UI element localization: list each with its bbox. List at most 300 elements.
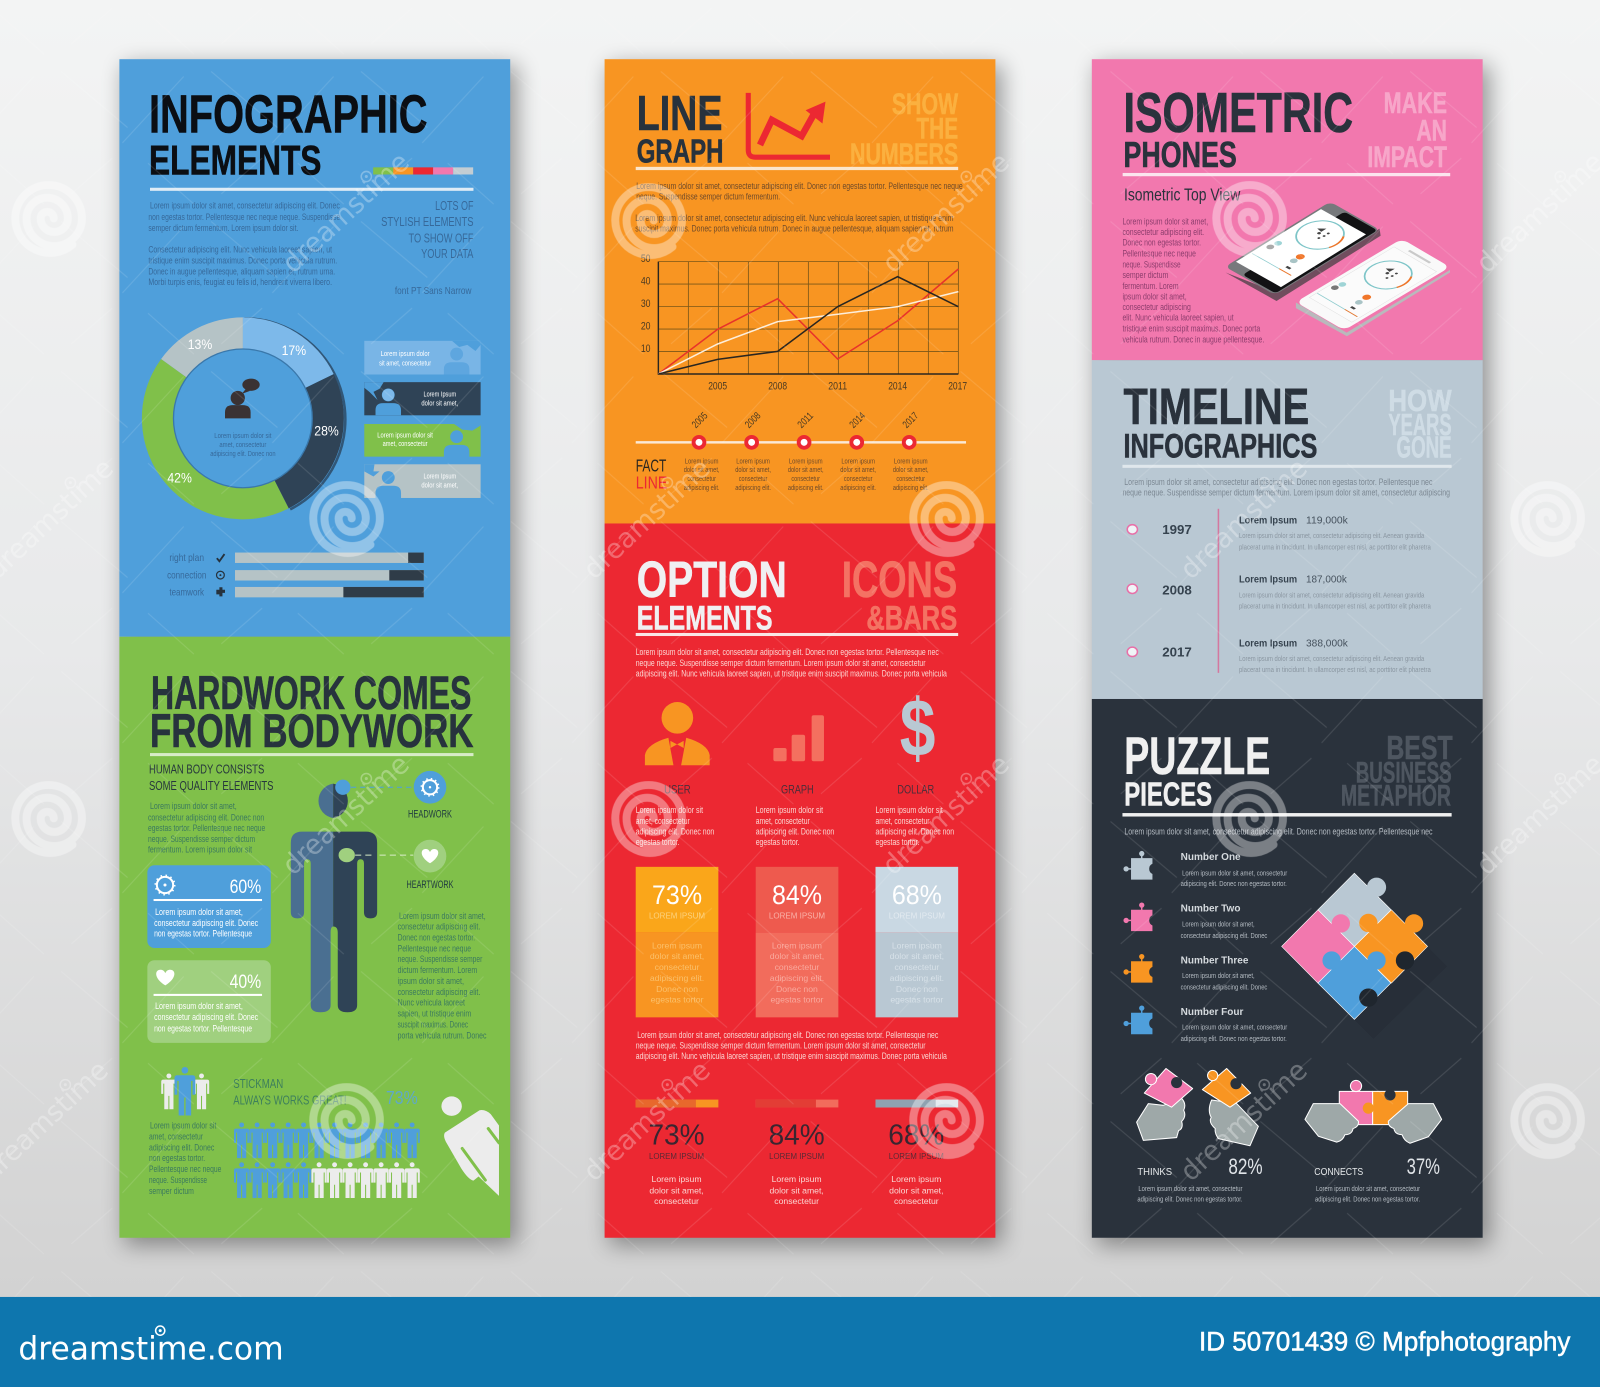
- body text: consectetur adipiscing elit.: [1122, 227, 1204, 237]
- stat: connects: 37%: [1407, 1154, 1440, 1179]
- legend icons: [1123, 851, 1152, 1034]
- x axis labels: 2008: [768, 380, 787, 392]
- phone: dark: [1225, 202, 1381, 301]
- donut chart: [142, 317, 345, 519]
- stat: thinks: THINKS: [1137, 1167, 1173, 1178]
- pictogram chart: [234, 1122, 420, 1198]
- timeline entry 1997: Lorem ipsum dolor sit amet, consectetur adipiscing elit. Aenean gravida: [1239, 531, 1425, 540]
- fact line label: [636, 456, 667, 492]
- timeline entry 2008: placerat urna in tincidunt. In ullamcorper est nisl, ac porttitor elit pharetra: [1239, 602, 1431, 611]
- body text: tristique enim suscipit maximus. Donec porta: [1122, 324, 1260, 334]
- intro text: Consectetur adipiscing elit. Nunc vehicula laoreet sapien, ut: [148, 245, 332, 255]
- speech bar labels: dolor sit amet,: [421, 481, 458, 489]
- timeline entry 1997: placerat urna in tincidunt. In ullamcorper est nisl, ac porttitor elit pharetra: [1239, 542, 1431, 551]
- stat captions: consectetur: [654, 1196, 699, 1206]
- body text: ipsum dolor sit amet,: [1122, 291, 1187, 301]
- card: 68%: Donec non: [896, 984, 938, 994]
- body text: [1122, 216, 1264, 345]
- card: 84%: dolor sit amet,: [770, 951, 824, 961]
- timeline years: 2011: [796, 410, 816, 431]
- icon descriptions: egestas tortor.: [636, 837, 680, 847]
- card: 73%: adipiscing elit.: [650, 973, 704, 983]
- intro text: [148, 201, 340, 287]
- timeline axis: [1218, 509, 1219, 673]
- body text left: neque. Suspendisse semper dictum: [148, 834, 255, 844]
- donut caption: amet, consectetur: [219, 440, 267, 449]
- timeline markers: [1127, 525, 1137, 657]
- body text: fermentum. Lorem: [1122, 281, 1179, 291]
- stat: thinks: 82%: [1228, 1154, 1263, 1179]
- side heading: icons and bars: ICONS: [842, 551, 957, 608]
- intro text: Donec in augue pellentesque, aliquam sapien et, rutrum urna.: [148, 267, 335, 277]
- progress labels: teamwork: [169, 588, 205, 599]
- progress labels: connection: [167, 571, 206, 582]
- icon: user: [645, 702, 710, 765]
- legend text: adipiscing elit. Donec non egestas tortor.: [1181, 879, 1287, 888]
- timeline descriptions: [684, 456, 929, 492]
- timeline descriptions: dolor sit amet,: [840, 465, 876, 474]
- side heading: show the numbers: NUMBERS: [850, 138, 958, 171]
- body text left: fermentum. Lorem ipsum dolor sit: [148, 845, 252, 855]
- heading: puzzle pieces: PIECES: [1124, 777, 1212, 814]
- series white: [658, 292, 958, 374]
- body text right: neque. Suspendisse semper: [398, 954, 482, 964]
- progress bars: [167, 553, 424, 599]
- stat: thinks: Lorem ipsum dolor sit amet, consectetur: [1138, 1184, 1243, 1193]
- icon descriptions: egestas tortor.: [876, 837, 919, 847]
- timeline years: 2008: [1162, 582, 1192, 597]
- body text lower left: [149, 1121, 222, 1196]
- connector: head to headwork: [351, 786, 413, 788]
- speech bar labels: Lorem Ipsum: [423, 473, 456, 481]
- card: 73%: 73%: [652, 880, 702, 910]
- stat captions: [649, 1174, 944, 1206]
- body text left: Lorem ipsum dolor sit amet,: [150, 801, 237, 811]
- side note: YOUR DATA: [421, 246, 474, 261]
- body text: consectetur adipiscing: [1122, 302, 1191, 312]
- heading: option elements: OPTION: [637, 551, 787, 608]
- stat captions: dolor sit amet,: [769, 1185, 824, 1195]
- fact line timeline: [636, 410, 966, 492]
- stickman heading: STICKMAN: [233, 1076, 283, 1091]
- side note: TO SHOW OFF: [408, 230, 473, 245]
- timeline descriptions: adipiscing elit.: [788, 483, 824, 492]
- card: 60%: Lorem ipsum dolor sit amet,: [155, 907, 243, 917]
- stickman heading: [233, 1076, 347, 1107]
- card: 40%: [147, 960, 271, 1043]
- body text right: ipsum dolor sit amet,: [398, 976, 464, 986]
- progress labels: right plan: [169, 553, 204, 564]
- card: 73%: LOREM IPSUM: [649, 911, 705, 920]
- stat figures: LOREM IPSUM: [769, 1151, 824, 1161]
- side heading: best business metaphor: BEST: [1386, 730, 1453, 767]
- icon: headwork: [414, 771, 446, 804]
- card: 68%: consectetur: [894, 962, 939, 972]
- icon: heartwork: [414, 840, 446, 872]
- stat figures: LOREM IPSUM: [889, 1151, 944, 1161]
- intro text: [635, 181, 963, 234]
- intro text: tristique enim suscipit maximus. Donec porta vehicula rutrum.: [148, 255, 337, 265]
- body text right: dictum fermentum. Lorem: [398, 965, 477, 975]
- side heading: how years gone: HOW: [1388, 384, 1452, 418]
- footer logo: dreamstime.com: [18, 1332, 284, 1368]
- middle text: adipiscing elit. Nunc vehicula laoreet sapien, ut tristique enim suscipit maximus. Donec porta vehicula: [636, 1051, 947, 1061]
- heading: infographic elements: [149, 85, 428, 183]
- side heading: show the numbers: SHOW: [892, 88, 958, 121]
- progress icons: [216, 554, 225, 596]
- middle text: Lorem ipsum dolor sit amet, consectetur adipiscing elit. Donec non egestas tortor. Pellentesque nec: [637, 1030, 939, 1040]
- intro text: semper dictum fermentum. Lorem ipsum dolor sit.: [148, 223, 298, 233]
- x axis labels: 2017: [948, 380, 967, 392]
- line chart: [641, 253, 967, 392]
- subheading: SOME QUALITY ELEMENTS: [149, 778, 274, 793]
- donut percentages: 28%: [314, 424, 339, 440]
- heading: timeline infographics: [1123, 378, 1317, 465]
- heading: puzzle pieces: [1124, 727, 1270, 814]
- body text: vehicula rutrum. Donec in augue pellentesque.: [1122, 335, 1264, 345]
- stat bars: [636, 1100, 958, 1107]
- stat: connects: Lorem ipsum dolor sit amet, consectetur: [1316, 1184, 1420, 1193]
- timeline entry 2008: [1239, 575, 1431, 611]
- stat figures: LOREM IPSUM: [649, 1151, 704, 1161]
- intro text: Morbi turpis enis, feugiat eu felis id, hendrerit viverra libero.: [148, 277, 332, 287]
- legend text: consectetur adipiscing elit. Donec: [1181, 982, 1267, 991]
- intro text: adipiscing elit. Nunc vehicula laoreet sapien, ut tristique enim suscipit maximus. Donec porta vehicula: [636, 669, 947, 679]
- stat figures: 84%: [769, 1120, 825, 1152]
- body text left: egestas tortor. Pellentesque nec neque: [148, 823, 265, 833]
- heading: timeline infographics: TIMELINE: [1123, 378, 1309, 435]
- stat figures: [648, 1120, 944, 1161]
- x axis labels: 2014: [888, 380, 907, 392]
- body text: elit. Nunc vehicula laoreet sapien, ut: [1122, 313, 1234, 323]
- card: 73%: [636, 867, 718, 1017]
- legend text: Number One: [1181, 852, 1241, 863]
- icon: rising graph: [748, 93, 830, 157]
- legend text: Lorem ipsum dolor sit amet, consectetur: [1182, 869, 1288, 878]
- connector: heart to heartwork: [355, 854, 413, 856]
- timeline descriptions: consectetur: [896, 474, 925, 483]
- donut percentages: 42%: [167, 471, 192, 487]
- footer credit: ID 50701439 © Mpfphotography: [1199, 1327, 1571, 1357]
- speech bar labels: amet, consectetur: [383, 440, 428, 448]
- heading: puzzle pieces: PUZZLE: [1124, 727, 1270, 786]
- timeline years: 2017: [901, 410, 921, 431]
- timeline entry 2017: Lorem ipsum dolor sit amet, consectetur adipiscing elit. Aenean gravida: [1239, 654, 1425, 663]
- body text right: consectetur adipiscing elit.: [398, 987, 480, 997]
- icon: gear: [155, 875, 175, 895]
- side heading: best business metaphor: METAPHOR: [1341, 780, 1451, 813]
- timeline descriptions: adipiscing elit.: [735, 483, 771, 492]
- icon: hand with pink piece: [1137, 1068, 1193, 1140]
- card: 84%: [756, 867, 838, 1017]
- speech bar labels: sit amet, consectetur: [379, 359, 432, 367]
- icon descriptions: amet, consectetur: [756, 816, 810, 826]
- stat captions: dolor sit amet,: [889, 1185, 944, 1195]
- speech bars: [364, 341, 481, 498]
- subheading: Isometric Top View: [1124, 185, 1241, 205]
- subheading: [149, 761, 274, 793]
- stat captions: consectetur: [894, 1196, 939, 1206]
- card: 40%: Lorem ipsum dolor sit amet,: [155, 1001, 243, 1011]
- icon labels: [407, 808, 454, 891]
- stat: connects: [1314, 1154, 1440, 1204]
- panel background blue: [119, 59, 510, 637]
- card: 84%: 84%: [772, 880, 822, 910]
- body text lower left: amet, consectetur: [149, 1131, 203, 1141]
- speech bar labels: dolor sit amet,: [421, 400, 458, 408]
- card: 60%: [147, 865, 271, 948]
- intro text: neque. Suspendisse semper dictum fermentum.: [636, 191, 780, 201]
- icon descriptions: [636, 805, 954, 847]
- card: 73%: dolor sit amet,: [650, 951, 704, 961]
- intro text: Lorem ipsum dolor sit amet, consectetur adipiscing elit. Donec non egestas tortor. Pellentesque nec: [636, 647, 939, 657]
- heading: hardwork: [150, 667, 474, 757]
- intro text: Lorem ipsum dolor sit amet, consectetur adipiscing elit. Donec non egestas tortor. Pellentesque nec neque: [636, 181, 963, 191]
- icon labels: USER: [664, 783, 691, 796]
- body text: Pellentesque nec neque: [1122, 249, 1196, 259]
- icon descriptions: egestas tortor.: [756, 837, 800, 847]
- panel: line graph: [605, 59, 995, 523]
- footer bar: [0, 1297, 1600, 1387]
- y axis labels: 30: [641, 298, 651, 310]
- panel background pink: [1092, 59, 1483, 360]
- card: 68%: adipiscing elit.: [890, 973, 944, 983]
- timeline entry 2008: Lorem ipsum dolor sit amet, consectetur adipiscing elit. Aenean gravida: [1239, 590, 1425, 599]
- timeline entry 1997: [1239, 515, 1431, 551]
- body text: Lorem ipsum dolor sit amet,: [1122, 216, 1208, 226]
- icon descriptions: amet, consectetur: [636, 816, 690, 826]
- panel background dark: [1092, 699, 1483, 1238]
- body text lower left: Lorem ipsum dolor sit: [150, 1121, 217, 1131]
- series red: [658, 269, 958, 374]
- timeline years: [690, 410, 921, 431]
- side heading: show the numbers: THE: [916, 112, 958, 145]
- icon labels: HEADWORK: [408, 808, 453, 820]
- stat: thinks: adipiscing elit. Donec non egestas tortor.: [1137, 1195, 1242, 1204]
- body text left: consectetur adipiscing elit. Donec non: [148, 812, 264, 822]
- side note: STYLISH ELEMENTS: [381, 214, 474, 229]
- progress labels: [167, 553, 206, 599]
- timeline markers: [692, 435, 917, 450]
- heading: infographic elements: ELEMENTS: [149, 136, 321, 183]
- side note: [381, 198, 474, 297]
- stat: 73%: 73%: [386, 1087, 418, 1108]
- icon: bar graph: [773, 715, 824, 761]
- timeline descriptions: dolor sit amet,: [893, 465, 929, 474]
- body text right: Nunc vehicula laoreet: [398, 998, 465, 1008]
- heading: isometric phones: [1123, 81, 1353, 175]
- legend text: Lorem ipsum dolor sit amet, consectetur: [1182, 1023, 1288, 1032]
- card: 40%: 40%: [230, 971, 261, 993]
- card: 68%: 68%: [892, 880, 942, 910]
- subheading: HUMAN BODY CONSISTS: [149, 761, 264, 776]
- body text: Donec non egestas tortor.: [1122, 238, 1201, 248]
- intro text: [636, 647, 947, 679]
- card: 73%: Lorem ipsum: [652, 940, 702, 950]
- panel: option elements: [605, 523, 995, 1238]
- side note: LOTS OF: [435, 198, 473, 213]
- legend text: consectetur adipiscing elit. Donec: [1181, 931, 1267, 940]
- icon descriptions: amet, consectetur: [876, 816, 930, 826]
- timeline descriptions: Lorem ipsum: [894, 456, 928, 465]
- panel background orange: [605, 59, 995, 523]
- panel: puzzle pieces: [1092, 699, 1483, 1238]
- card: 40%: consectetur adipiscing elit. Donec: [154, 1012, 259, 1022]
- icon labels: [664, 783, 934, 796]
- speech bar labels: [377, 350, 458, 489]
- body text lower left: neque. Suspendisse: [149, 1175, 207, 1185]
- intro text: Lorem ipsum dolor sit amet, consectetur adipiscing elit. Nunc vehicula laoreet sapien, ut tristique enim: [635, 213, 954, 223]
- intro text: neque neque. Suspendisse semper dictum fermentum. Lorem ipsum dolor sit amet, consectetur: [636, 658, 926, 668]
- timeline years: [1162, 522, 1192, 660]
- timeline descriptions: Lorem ipsum: [789, 456, 823, 465]
- body text right: [398, 911, 487, 1040]
- timeline descriptions: dolor sit amet,: [788, 465, 824, 474]
- timeline descriptions: adipiscing elit.: [893, 483, 929, 492]
- body text lower left: Pellentesque nec neque: [149, 1164, 222, 1174]
- body text: semper dictum: [1122, 270, 1168, 280]
- icon: person with speech bubble: [225, 379, 260, 418]
- heading: infographic elements: INFOGRAPHIC: [149, 85, 428, 145]
- heading: hardwork: HARDWORK COMES: [151, 667, 471, 719]
- y axis labels: [641, 253, 651, 355]
- timeline entry 2017: [1239, 639, 1431, 674]
- timeline descriptions: Lorem ipsum: [841, 456, 875, 465]
- stat: connects: adipiscing elit. Donec non egestas tortor.: [1315, 1195, 1420, 1204]
- timeline entry 2008: 187,000k: [1306, 575, 1347, 586]
- middle text: neque neque. Suspendisse semper dictum fermentum. Lorem ipsum dolor sit amet, consectetur: [636, 1040, 926, 1050]
- card: 40%: non egestas tortor. Pellentesque: [154, 1023, 252, 1033]
- icon descriptions: adipiscing elit. Donec non: [876, 827, 954, 837]
- card: 73%: Donec non: [656, 984, 698, 994]
- stat captions: Lorem ipsum: [772, 1174, 822, 1184]
- stat: connects: CONNECTS: [1314, 1167, 1364, 1178]
- heading: isometric phones: ISOMETRIC: [1123, 81, 1353, 144]
- timeline descriptions: dolor sit amet,: [684, 465, 719, 474]
- y axis labels: 40: [641, 275, 651, 287]
- icon descriptions: adipiscing elit. Donec non: [636, 827, 714, 837]
- heading: isometric phones: PHONES: [1123, 135, 1237, 175]
- icon labels: HEARTWORK: [407, 879, 454, 891]
- icon: hand with orange piece: [1202, 1068, 1258, 1146]
- panel: infographic elements: [119, 59, 510, 637]
- card: 60%: non egestas tortor. Pellentesque: [154, 928, 252, 938]
- fact line label: FACT: [636, 456, 667, 476]
- side heading: make an impact: MAKE: [1384, 87, 1447, 120]
- x axis labels: 2011: [828, 380, 847, 392]
- fact line label: LINE: [636, 472, 667, 492]
- legend text: [1181, 852, 1288, 1043]
- side heading: make an impact: AN: [1416, 115, 1447, 148]
- timeline descriptions: Lorem ipsum: [736, 456, 770, 465]
- timeline years: 2005: [690, 410, 710, 431]
- intro text: neque neque. Suspendisse semper dictum fermentum. Lorem ipsum dolor sit amet, consectetur adipiscing: [1122, 488, 1450, 498]
- body text right: Pellentesque nec neque: [398, 943, 471, 953]
- heading: line graph: GRAPH: [637, 134, 723, 171]
- intro text: Lorem ipsum dolor sit amet, consectetur adipiscing elit. Donec: [150, 201, 340, 211]
- icon: three figures: [161, 1067, 209, 1116]
- body text right: consectetur adipiscing elit.: [398, 922, 480, 932]
- stat captions: Lorem ipsum: [891, 1174, 941, 1184]
- stat: thinks: [1137, 1154, 1263, 1204]
- legend text: adipiscing elit. Donec non egestas tortor.: [1181, 1034, 1287, 1043]
- x axis labels: 2005: [708, 380, 727, 392]
- body text right: sapien, ut tristique enim: [398, 1009, 471, 1019]
- heading: option elements: ELEMENTS: [637, 600, 772, 638]
- donut caption: [210, 431, 276, 458]
- side heading: show the numbers: [850, 88, 958, 171]
- heading: hardwork: FROM BODYWORK: [150, 705, 474, 757]
- timeline descriptions: consectetur: [791, 474, 820, 483]
- icon labels: GRAPH: [781, 783, 814, 796]
- side heading: icons and bars: [842, 551, 957, 638]
- card: 84%: adipiscing elit.: [770, 973, 824, 983]
- colour swatch bar: [373, 167, 473, 174]
- card: 73%: egestas tortor: [651, 995, 704, 1005]
- timeline entry 2017: 388,000k: [1306, 639, 1348, 650]
- body text lower left: adipiscing elit. Donec: [149, 1142, 215, 1152]
- card: 68%: egestas tortor: [890, 995, 943, 1005]
- legend text: Number Three: [1181, 955, 1249, 966]
- panel background grey: [1092, 360, 1483, 699]
- heading: option elements: [637, 551, 787, 638]
- speech bar labels: Lorem ipsum dolor sit: [377, 431, 433, 439]
- card: 60%: 60%: [230, 876, 261, 898]
- timeline descriptions: consectetur: [739, 474, 768, 483]
- stat figures: 73%: [648, 1120, 705, 1152]
- timeline descriptions: dolor sit amet,: [735, 465, 771, 474]
- column shadows: [124, 65, 1490, 1245]
- body text lower left: non egestas tortor.: [149, 1153, 205, 1163]
- timeline entry 1997: Lorem Ipsum: [1239, 515, 1298, 526]
- card: 84%: consectetur: [775, 962, 819, 972]
- card: 84%: LOREM IPSUM: [769, 911, 825, 920]
- card: 84%: egestas tortor: [770, 995, 824, 1005]
- stat captions: consectetur: [774, 1196, 819, 1206]
- side heading: make an impact: [1367, 87, 1447, 174]
- card: 68%: dolor sit amet,: [890, 951, 944, 961]
- heading: line graph: LINE: [637, 87, 722, 141]
- card: 73%: consectetur: [655, 962, 700, 972]
- side heading: icons and bars: &BARS: [866, 600, 957, 638]
- legend text: Number Two: [1181, 904, 1240, 915]
- timeline descriptions: consectetur: [687, 474, 716, 483]
- phone: white: [1296, 239, 1450, 336]
- big puzzle: [1282, 873, 1447, 1039]
- stat captions: Lorem ipsum: [652, 1174, 702, 1184]
- body figure: [291, 780, 377, 1012]
- timeline years: 2017: [1162, 645, 1192, 660]
- icon descriptions: adipiscing elit. Donec non: [756, 827, 834, 837]
- intro text: non egestas tortor. Pellentesque nec neque neque. Suspendisse: [148, 212, 340, 222]
- donut percentages: 17%: [282, 343, 306, 359]
- icon descriptions: Lorem ipsum dolor sit: [876, 805, 943, 815]
- body text lower left: semper dictum: [149, 1186, 194, 1196]
- timeline years: 1997: [1162, 522, 1192, 537]
- side heading: make an impact: IMPACT: [1367, 141, 1447, 174]
- icon: diving figure: [441, 1096, 499, 1196]
- card: 60%: consectetur adipiscing elit. Donec: [154, 918, 259, 928]
- heading: line graph: [637, 87, 723, 171]
- icon: heart: [156, 970, 174, 985]
- speech bar labels: Lorem Ipsum: [423, 390, 456, 398]
- donut caption: adipiscing elit. Donec non: [210, 449, 276, 458]
- card: 84%: Donec non: [776, 984, 818, 994]
- side heading: best business metaphor: BUSINESS: [1356, 757, 1452, 790]
- series black: [658, 277, 958, 374]
- donut percentages: [167, 337, 339, 487]
- icon: dollar: $: [900, 683, 936, 774]
